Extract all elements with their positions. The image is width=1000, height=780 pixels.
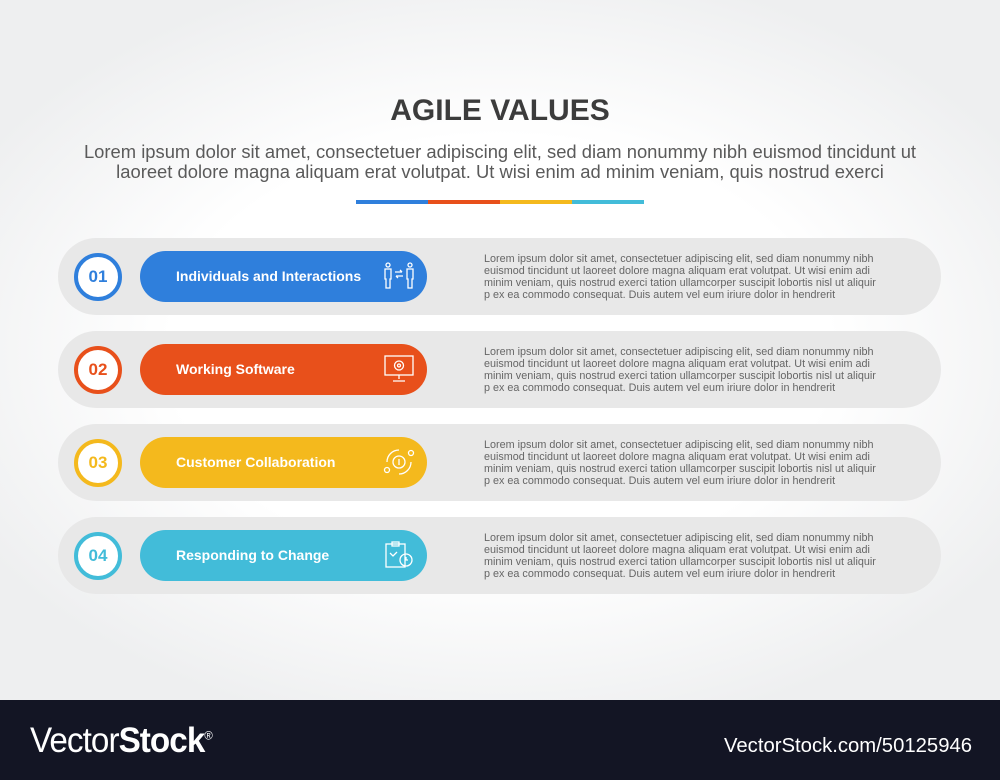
- text block 1: p ex ea commodo consequat. Duis autem vel eum iriure dolor in hendrerit: [484, 289, 835, 301]
- text block 1: Lorem ipsum dolor sit amet, consectetuer adipiscing elit, sed diam nonummy nibh: [484, 253, 873, 265]
- pill: Responding to Change: [140, 530, 427, 581]
- text block 4: Lorem ipsum dolor sit amet, consectetuer adipiscing elit, sed diam nonummy nibh: [484, 532, 873, 544]
- number 03: 03: [89, 453, 107, 472]
- pill: Customer Collaboration: [140, 437, 427, 488]
- text block 4: euismod tincidunt ut laoreet dolore magna aliquam erat volutpat. Ut wisi enim adi: [484, 544, 870, 556]
- text block 3: p ex ea commodo consequat. Duis autem vel eum iriure dolor in hendrerit: [484, 475, 835, 487]
- pill: Individuals and Interactions: Individuals and Interactions: [176, 268, 361, 284]
- row 1: [58, 238, 941, 315]
- row 4: [58, 517, 941, 594]
- number 02: [74, 346, 122, 394]
- text block 3: [484, 439, 876, 487]
- text block 2: euismod tincidunt ut laoreet dolore magna aliquam erat volutpat. Ut wisi enim adi: [484, 358, 870, 370]
- text block 3: Lorem ipsum dolor sit amet, consectetuer adipiscing elit, sed diam nonummy nibh: [484, 439, 873, 451]
- number 03: [74, 439, 122, 487]
- text block 1: minim veniam, quis nostrud exerci tation ullamcorper suscipit lobortis nisl ut aliquir: [484, 277, 876, 289]
- footer id: VectorStock.com/50125946: [724, 735, 972, 757]
- pill: Responding to Change: Responding to Change: [176, 547, 329, 563]
- color bar: [356, 200, 644, 204]
- row 2: [58, 331, 941, 408]
- text block 2: [484, 346, 876, 394]
- subtitle: Lorem ipsum dolor sit amet, consectetuer adipiscing elit, sed diam nonummy nibh euismod tincidunt ut: [84, 141, 916, 162]
- footer bar: [0, 700, 1000, 780]
- text block 1: euismod tincidunt ut laoreet dolore magna aliquam erat volutpat. Ut wisi enim adi: [484, 265, 870, 277]
- pill: Working Software: [140, 344, 427, 395]
- pill: Customer Collaboration: Customer Collaboration: [176, 454, 335, 470]
- subtitle: laoreet dolore magna aliquam erat volutpat. Ut wisi enim ad minim veniam, quis nostrud exerci: [116, 161, 884, 182]
- text block 2: Lorem ipsum dolor sit amet, consectetuer adipiscing elit, sed diam nonummy nibh: [484, 346, 873, 358]
- text block 2: p ex ea commodo consequat. Duis autem vel eum iriure dolor in hendrerit: [484, 382, 835, 394]
- text block 4: [484, 532, 876, 580]
- footer logo: VectorStock®: [30, 721, 212, 760]
- number 04: [74, 532, 122, 580]
- pill: Working Software: Working Software: [176, 361, 295, 377]
- number 01: 01: [89, 267, 107, 286]
- title: AGILE VALUES: [390, 94, 610, 127]
- text block 3: euismod tincidunt ut laoreet dolore magna aliquam erat volutpat. Ut wisi enim adi: [484, 451, 870, 463]
- text block 2: minim veniam, quis nostrud exerci tation ullamcorper suscipit lobortis nisl ut aliquir: [484, 370, 876, 382]
- number 02: 02: [89, 360, 107, 379]
- text block 4: minim veniam, quis nostrud exerci tation ullamcorper suscipit lobortis nisl ut aliquir: [484, 556, 876, 568]
- number 01: [74, 253, 122, 301]
- subtitle: [84, 141, 916, 182]
- pill: Individuals and Interactions: [140, 251, 427, 302]
- text block 3: minim veniam, quis nostrud exerci tation ullamcorper suscipit lobortis nisl ut aliquir: [484, 463, 876, 475]
- number 04: 04: [89, 546, 107, 565]
- row 3: [58, 424, 941, 501]
- text block 4: p ex ea commodo consequat. Duis autem vel eum iriure dolor in hendrerit: [484, 568, 835, 580]
- text block 1: [484, 253, 876, 301]
